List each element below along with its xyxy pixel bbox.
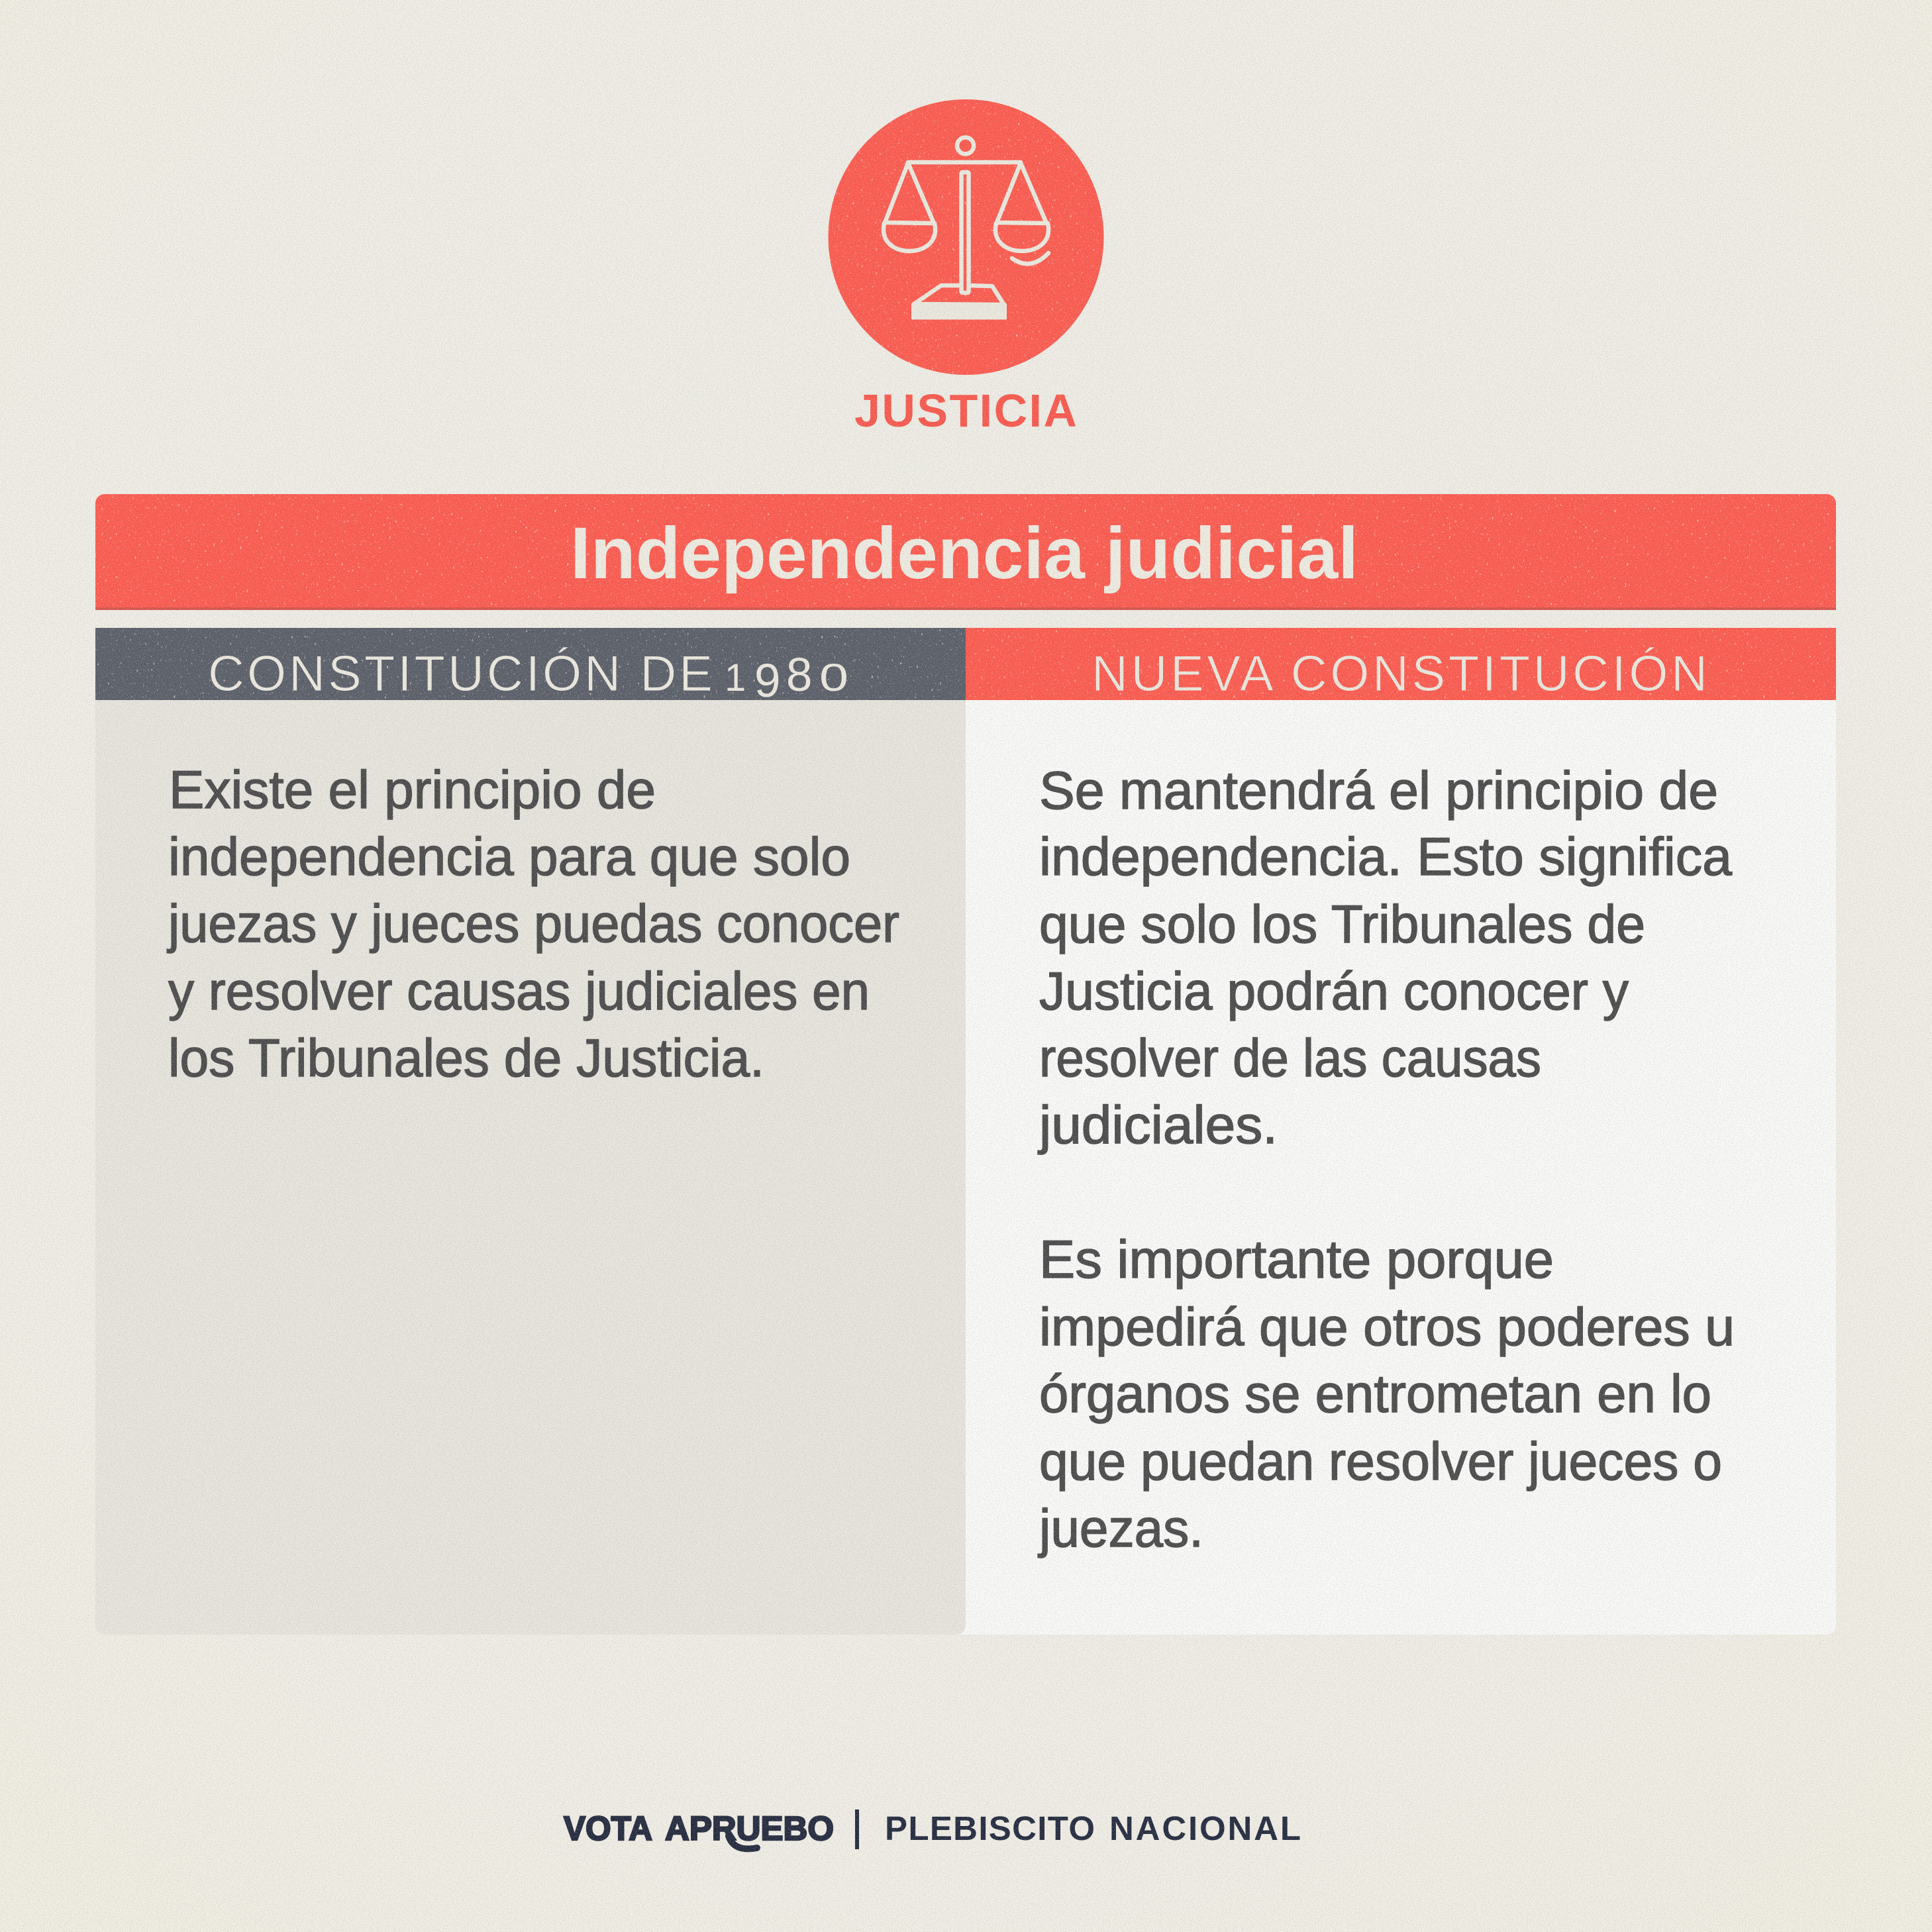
footer caption: PLEBISCITO [885, 1809, 1095, 1847]
text block: old constitution: independencia para que solo [168, 827, 850, 887]
icon detail: post [962, 172, 968, 293]
campaign logo [564, 1809, 834, 1849]
column header text: 9 [754, 655, 780, 707]
text block: old constitution: y resolver causas judiciales en [168, 962, 870, 1021]
text block: why it matters: impedirá que otros poderes u [1039, 1297, 1735, 1357]
icon detail: motion curve [1012, 253, 1048, 264]
text block: new constitution explanation [1038, 761, 1733, 1155]
text block: why it matters: Es importante porque [1039, 1230, 1554, 1290]
icon: scales of justice in red circle [828, 99, 1103, 375]
panel: left column body [95, 700, 1023, 1635]
footer caption [885, 1809, 1301, 1847]
column header text: 8 [786, 649, 812, 701]
text block: new constitution explanation: Se mantendrá el principio de [1039, 761, 1718, 821]
text block: new constitution explanation: que solo los Tribunales de [1039, 895, 1645, 954]
column header text: 1 [725, 656, 746, 699]
icon detail: left pan [884, 163, 935, 251]
text block: old constitution [167, 760, 899, 1088]
icon detail: scale ring [957, 138, 974, 154]
text block: new constitution explanation: resolver de las causas [1039, 1029, 1541, 1088]
icon detail: base block [911, 303, 1007, 319]
column header text: NUEVA CONSTITUCIÓN [1092, 646, 1707, 702]
category label: JUSTICIA [854, 385, 1077, 436]
text block: new constitution explanation: independencia. Esto significa [1039, 827, 1733, 887]
column header text: CONSTITUCIÓN DE [208, 646, 713, 702]
text block: why it matters [1038, 1230, 1735, 1558]
text block: new constitution explanation: Justicia podrán conocer y [1039, 962, 1629, 1021]
footer caption: NACIONAL [1109, 1809, 1301, 1847]
text block: new constitution explanation: judiciales. [1038, 1095, 1278, 1155]
text block: why it matters: órganos se entrometan en lo [1039, 1364, 1711, 1424]
divider bar [855, 1809, 859, 1849]
campaign logo: APRUEBO [665, 1809, 834, 1847]
text block: old constitution: Existe el principio de [169, 760, 656, 820]
text block: old constitution: juezas y jueces puedas conocer [167, 894, 899, 954]
panel: new constitution [956, 700, 1836, 1635]
footer [564, 1809, 1301, 1849]
icon detail: right pan [995, 163, 1048, 251]
title: Independencia judicial [570, 513, 1358, 594]
text block: why it matters: juezas. [1038, 1499, 1203, 1558]
text block: old constitution: los Tribunales de Justicia. [168, 1029, 764, 1088]
column header: Constitución de 1980 [95, 628, 966, 707]
icon detail: base [914, 285, 1004, 305]
panel: old constitution [95, 689, 966, 1635]
column header: Nueva Constitución [966, 628, 1836, 702]
icon detail: beam [908, 160, 1021, 164]
title bar [95, 494, 1836, 610]
campaign logo: VOTA [564, 1809, 652, 1847]
column header text: 0 [819, 656, 848, 699]
text block: why it matters: que puedan resolver jueces o [1039, 1432, 1722, 1492]
